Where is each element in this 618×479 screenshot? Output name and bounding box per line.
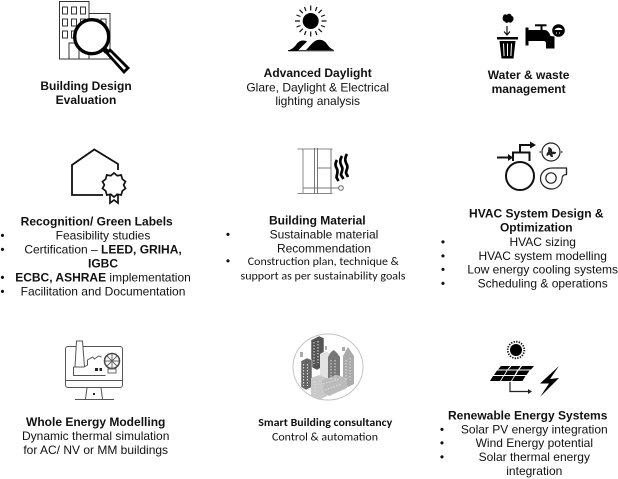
panel: water and waste (488, 14, 570, 96)
panel: recognition and green labels (0, 150, 191, 298)
text: building material list: Building Material (269, 213, 366, 227)
text: renewable energy systems: integration (506, 464, 562, 478)
icon: compressor, fan and blower (497, 142, 566, 190)
text: recognition and green labels list (0, 215, 191, 298)
text: hvac list: • (441, 277, 445, 291)
heading: water and waste management: management (492, 82, 566, 96)
heading: water and waste management: Water & waste (488, 68, 570, 82)
text: building material list: Construction plan, technique & (248, 255, 399, 269)
heading: water and waste management (488, 68, 570, 96)
text: hvac list: Scheduling & operations (478, 277, 608, 291)
panel: whole energy modelling (22, 341, 169, 457)
text: advanced daylight: lighting analysis (275, 94, 360, 108)
text: building material list: Recommendation (277, 242, 371, 256)
icon: building with magnifier (60, 2, 128, 72)
text: renewable energy systems: • (440, 436, 444, 450)
text: building material list: support as per sustainability goals (240, 269, 406, 283)
panel: renewable energy systems (440, 342, 608, 478)
text: recognition and green labels list: Feasibility studies (56, 229, 150, 243)
text: recognition and green labels list: • (0, 229, 5, 243)
panel: advanced daylight (246, 6, 389, 108)
text: advanced daylight: Glare, Daylight & Electrical (246, 80, 389, 94)
text: hvac list: • (441, 249, 445, 263)
icon: wall section with heat (298, 148, 348, 194)
text: hvac list (441, 207, 618, 291)
text: recognition and green labels list: IGBC (88, 257, 118, 271)
text: recognition and green labels list: ECBC, ASHRAE implementation (15, 270, 191, 284)
text: recognition and green labels list: Recognition/ Green Labels (21, 215, 173, 229)
panel: building material (226, 148, 406, 283)
text: whole energy modelling: for AC/ NV or MM buildings (23, 443, 168, 457)
heading: building design evaluation (40, 79, 132, 107)
text: recognition and green labels list: Facilitation and Documentation (21, 284, 185, 298)
text: renewable energy systems: Solar thermal energy (479, 450, 590, 464)
heading: building design evaluation: Evaluation (56, 93, 116, 107)
panel: hvac (441, 142, 618, 291)
text: renewable energy systems (440, 408, 608, 478)
text: hvac list: • (441, 235, 445, 249)
text: hvac list: HVAC System Design & (469, 207, 604, 221)
text: hvac list: Optimization (500, 221, 573, 235)
text: recognition and green labels list: Certification – LEED, GRIHA, (24, 243, 182, 257)
text: renewable energy systems: • (440, 450, 444, 464)
text: building material list: • (226, 254, 230, 268)
text: hvac list: HVAC sizing (509, 235, 576, 249)
text: recognition and green labels list: • (0, 243, 5, 257)
text: recognition and green labels list: • (0, 284, 5, 298)
text: building material list (226, 213, 406, 283)
icon: isometric city in circle (293, 334, 363, 400)
heading: building design evaluation: Building Design (40, 79, 132, 93)
text: whole energy modelling: Dynamic thermal simulation (22, 429, 169, 443)
text: smart building consultancy: Control & automation (272, 431, 378, 445)
icon: house with badge (72, 150, 125, 203)
text: hvac list: Low energy cooling systems (467, 263, 618, 277)
text: whole energy modelling (22, 415, 169, 457)
icon: monitor with factory and bulb (66, 341, 122, 400)
icon: bin and tap (497, 14, 565, 58)
text: advanced daylight: Advanced Daylight (264, 66, 372, 80)
text: renewable energy systems: Renewable Energy Systems (448, 408, 608, 422)
text: building material list: • (226, 228, 230, 242)
text: hvac list: • (441, 263, 445, 277)
icon: sun over hills (288, 6, 334, 51)
panel: smart building consultancy (258, 334, 393, 445)
text: hvac list: HVAC system modelling (478, 249, 607, 263)
text: smart building consultancy (258, 416, 393, 445)
text: building material list: Sustainable material (270, 228, 378, 242)
panel: building design evaluation (40, 2, 132, 107)
text: recognition and green labels list: • (0, 270, 5, 284)
text: advanced daylight (246, 66, 389, 108)
text: renewable energy systems: Wind Energy potential (476, 436, 593, 450)
text: renewable energy systems: • (440, 422, 444, 436)
text: whole energy modelling: Whole Energy Modelling (26, 415, 165, 429)
text: renewable energy systems: Solar PV energy integration (461, 422, 608, 436)
text: smart building consultancy: Smart Building consultancy (258, 416, 393, 430)
icon: sun, solar panel and bolt (490, 342, 559, 397)
